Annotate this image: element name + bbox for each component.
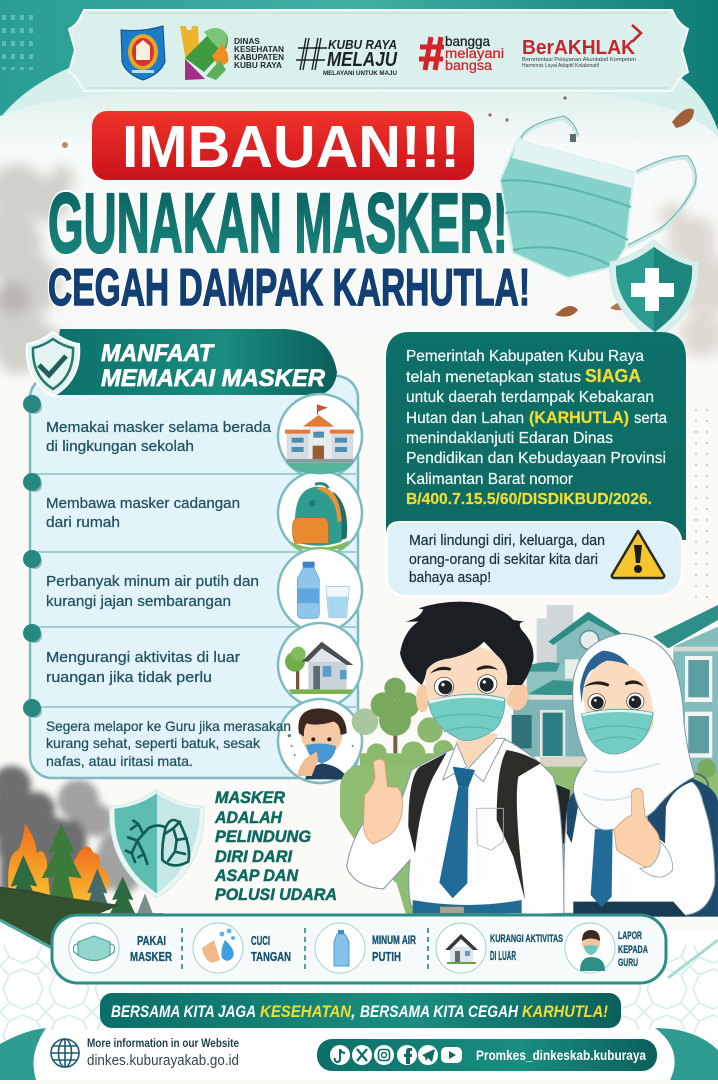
action: kurangi aktivitas (436, 923, 563, 973)
text: masker slogan: ASAP DAN (214, 867, 299, 885)
item 1 text (46, 419, 272, 455)
logo: Kubu Raya shield (121, 26, 165, 80)
heading text: MEMAKAI MASKER (101, 365, 326, 392)
logo: Kubu Raya Melaju: MELAYANI UNTUK MAJU (323, 71, 397, 77)
item 5 text (46, 718, 291, 769)
notice text: Hutan dan Lahan (406, 410, 524, 427)
smoke left and right (0, 96, 718, 374)
face (425, 647, 509, 742)
panel: manfaat memakai masker (23, 329, 362, 783)
action: pakai masker: MASKER (130, 949, 172, 964)
item 3 text: Perbanyak minum air putih dan (46, 573, 259, 590)
logo text: Dinas Kesehatan: KABUPATEN (234, 53, 284, 62)
ears (416, 684, 429, 712)
girl belt (573, 902, 687, 917)
light callout box (387, 522, 682, 596)
panel heading pill (50, 329, 337, 395)
callout text: orang-orang di sekitar kita dari (409, 552, 598, 568)
action: minum air putih: MINUM AIR (372, 933, 416, 947)
notice text: Pemerintah Kabupaten Kubu Raya (406, 348, 644, 365)
belt (413, 900, 522, 913)
logo: bangga melayani bangsa: melayani (445, 45, 504, 61)
ground (0, 887, 163, 920)
logo text: Dinas Kesehatan: KUBU RAYA (234, 61, 282, 70)
list background (30, 376, 358, 778)
icon: boy coughing (288, 708, 354, 779)
item 4 text (46, 649, 240, 686)
footer (0, 1028, 718, 1080)
underscarf (580, 651, 629, 703)
girl eyes and brows (583, 680, 644, 710)
callout text: Mari lindungi diri, keluarga, dan (409, 533, 605, 549)
forest fire illustration (0, 766, 163, 920)
red imbauan pill: IMBAUAN!!! (122, 114, 460, 180)
icon: house (285, 642, 353, 694)
notice text: SIAGA (585, 366, 641, 386)
heading text (101, 340, 326, 392)
boy backpack side (553, 783, 570, 843)
text: masker slogan: DIRI DARI (215, 848, 292, 866)
icon circles (278, 394, 362, 783)
icon: lung shield (110, 789, 204, 898)
item 4 text: Mengurangi aktivitas di luar (46, 649, 240, 666)
logo: bangga melayani bangsa (419, 33, 504, 73)
header plaque with logos (69, 10, 688, 91)
tie (439, 767, 475, 898)
notice text: untuk daerah terdampak Kebakaran (406, 389, 654, 406)
boy face mask (428, 685, 513, 741)
boy shirt and arm (347, 740, 564, 915)
icon: check shield (27, 332, 79, 396)
action: kurangi aktivitas: KURANGI AKTIVITAS (490, 933, 563, 945)
icon: surgical mask (500, 116, 696, 278)
slogan banner (100, 993, 621, 1028)
action: kurangi aktivitas: DI LUAR (490, 948, 516, 963)
pocket (477, 808, 503, 850)
student: girl (564, 633, 718, 917)
callout text (409, 533, 605, 586)
forest ground foreground (0, 888, 718, 978)
item 3 text (46, 573, 259, 610)
item markers (23, 395, 42, 718)
notice text: B/400.7.15.5/60/DISDIKBUD/2026. (406, 491, 652, 508)
logo: Kubu Raya Melaju: MELAJU (327, 49, 397, 71)
notice text: (KARHUTLA) (529, 409, 629, 427)
text: masker slogan: POLUSI UDARA (215, 886, 337, 904)
backpack straps (408, 753, 447, 853)
slogan banner: KESEHATAN (260, 1002, 352, 1021)
notice text: serta (634, 410, 667, 427)
action: cuci tangan: CUCI (251, 933, 270, 948)
action: lapor kepada guru: LAPOR (618, 930, 642, 942)
panel: government notice (386, 332, 686, 596)
social media pill: Promkes_dinkeskab.kuburaya (476, 1047, 646, 1063)
item 4 text: ruangan jika tidak perlu (46, 669, 212, 686)
logo: BerAKHLAK: BerAKHLAK (522, 37, 636, 59)
text: masker slogan: ADALAH (214, 809, 283, 827)
action: minum air putih (315, 923, 416, 973)
slogan banner: , (350, 1002, 356, 1021)
action: cuci tangan (193, 923, 291, 973)
teal notice box (386, 332, 686, 540)
item 2 text (46, 495, 240, 531)
pine trees (7, 823, 153, 913)
icon: school (285, 405, 354, 474)
list dividers (32, 474, 356, 707)
icon: bottle and glass (297, 562, 349, 618)
website text: dinkes.kuburayakab.go.id (87, 1053, 239, 1069)
action: lapor kepada guru (565, 923, 648, 973)
student: boy (347, 602, 570, 915)
text: masker slogan (214, 789, 337, 904)
school scene behind students (340, 605, 718, 917)
icon: backpack (290, 484, 350, 549)
icon: plus shield (610, 240, 698, 340)
logo text: Dinas Kesehatan (234, 37, 284, 70)
logo: bangga melayani bangsa: bangga (445, 33, 490, 49)
hair (400, 602, 533, 685)
logo: bangga melayani bangsa: bangsa (445, 57, 492, 73)
logo: Kubu Raya Melaju: KUBU RAYA (328, 38, 397, 52)
notice text: menindaklanjuti Edaran Dinas (406, 430, 613, 447)
callout text: bahaya asap! (409, 570, 491, 586)
girl hand thumbs up (614, 788, 660, 868)
girl tie (591, 829, 613, 907)
item 5 text: Segera melapor ke Guru jika merasakan (46, 718, 291, 734)
logo: Kabupaten K mark (180, 26, 228, 80)
notice text: Pendidikan dan Kebudayaan Provinsi (406, 450, 666, 467)
girl backpack straps (567, 772, 696, 843)
item 5 text: kurang sehat, seperti batuk, sesak (46, 735, 261, 751)
logo text: Dinas Kesehatan: DINAS (234, 37, 261, 46)
action: lapor kepada guru: GURU (618, 957, 638, 969)
panel: five actions strip (52, 915, 666, 983)
girl backpack (687, 777, 718, 917)
item 5 text: nafas, atau iritasi mata. (46, 753, 193, 769)
icon: warning triangle (612, 531, 664, 578)
logo: BerAKHLAK: Berorientasi Pelayanan Akuntabel Kompeten (522, 57, 636, 63)
dark smoke (0, 766, 140, 907)
girl face mask (582, 709, 653, 754)
slogan banner: KARHUTLA! (522, 1002, 608, 1021)
action: lapor kepada guru: KEPADA (618, 944, 648, 956)
item 1 text: di lingkungan sekolah (46, 438, 194, 455)
icon: globe (51, 1039, 79, 1067)
notice text: telah menetapkan status (406, 369, 581, 386)
notice text (406, 348, 667, 508)
logo: Kubu Raya Melaju (296, 38, 397, 77)
heading text: MANFAAT (101, 340, 215, 367)
logo: BerAKHLAK (522, 25, 641, 69)
slogan banner: BERSAMA KITA CEGAH (360, 1002, 519, 1021)
neck (457, 733, 500, 768)
slogan banner: BERSAMA KITA JAGA (111, 1002, 256, 1021)
action: pakai masker (69, 923, 172, 973)
text: masker slogan: PELINDUNG (215, 828, 311, 846)
hijab (573, 633, 695, 830)
website text (87, 1038, 239, 1069)
website text: More information in our Website (87, 1038, 239, 1050)
logo: BerAKHLAK: Harmonis Loyal Adaptif Kolaboratif (522, 63, 600, 69)
item 3 text: kurangi jajan sembarangan (46, 593, 231, 610)
logo text: Dinas Kesehatan: KESEHATAN (234, 45, 284, 54)
girl face (583, 661, 654, 755)
girl cuff (640, 842, 673, 877)
action: pakai masker: PAKAI (137, 933, 166, 948)
text: masker slogan: MASKER (215, 789, 285, 807)
action: minum air putih: PUTIH (372, 949, 401, 964)
item 2 text: Membawa masker cadangan (46, 495, 240, 512)
eyes and brows (430, 665, 498, 696)
flames (8, 823, 110, 907)
item 2 text: dari rumah (46, 514, 120, 531)
girl shirt (564, 780, 715, 916)
notice text: Kalimantan Barat nomor (406, 471, 573, 488)
collar (443, 738, 505, 782)
hand thumbs up (363, 759, 402, 844)
title: gunakan masker (48, 176, 508, 270)
action: cuci tangan: TANGAN (251, 949, 291, 964)
social media pill (317, 1039, 657, 1071)
item 1 text: Memakai masker selama berada (46, 419, 272, 436)
